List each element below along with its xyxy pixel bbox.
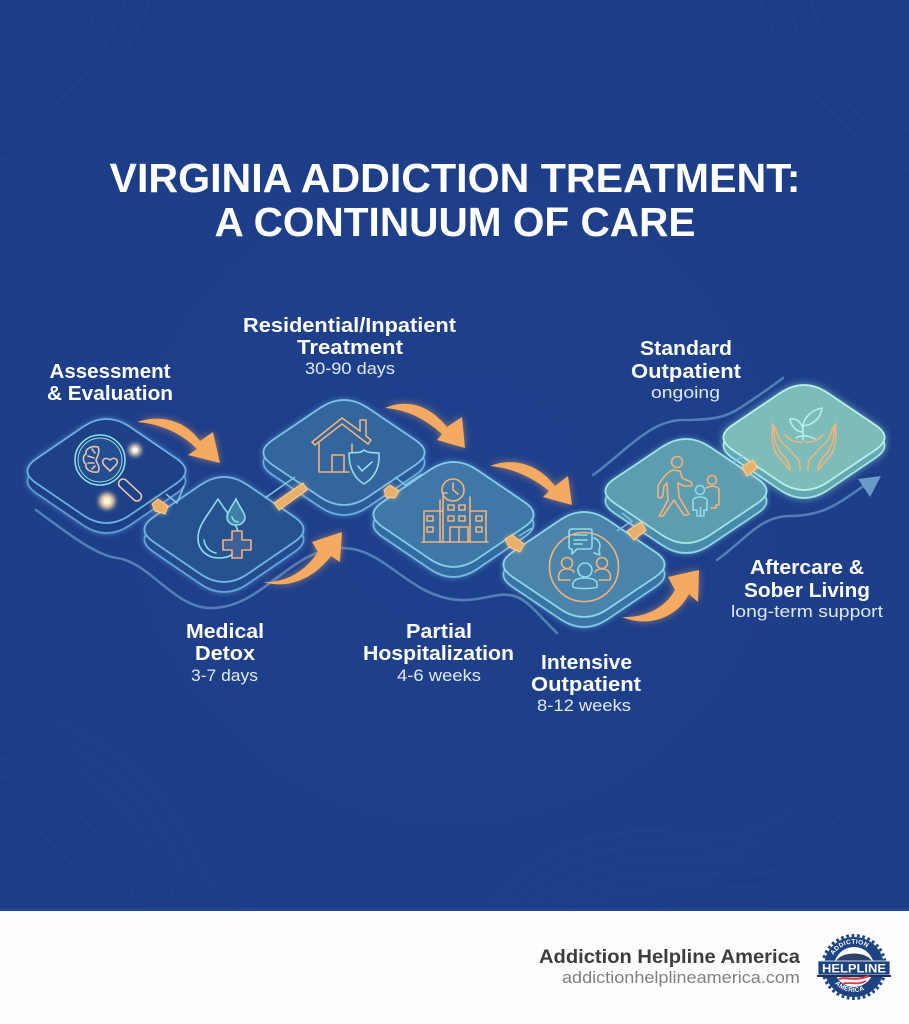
label: standard outpatient: ongoing — [651, 384, 720, 402]
label: medical detox: 3-7 days — [191, 667, 258, 685]
icon: water drops and medical cross — [198, 499, 251, 558]
tile 5: intensive outpatient — [503, 512, 665, 627]
arrow: intensive to standard — [622, 570, 699, 621]
label: medical detox: Medical — [186, 621, 264, 643]
label: partial hospitalization: Hospitalization — [363, 643, 514, 665]
label: medical detox — [186, 621, 264, 685]
logo badge: ADDICTION — [830, 939, 869, 956]
label: assessment — [47, 361, 173, 405]
label: residential: Treatment — [297, 337, 403, 359]
connector: 6 to 7 — [742, 460, 757, 476]
label: standard outpatient: Outpatient — [631, 361, 741, 383]
label: standard outpatient: Standard — [640, 338, 732, 360]
arrow: partial to intensive — [490, 462, 572, 505]
label: intensive outpatient — [531, 652, 641, 715]
connector: 2 to 3 — [274, 483, 307, 510]
label: standard outpatient — [631, 338, 741, 402]
tile link bands — [166, 455, 745, 536]
icon: house with shield — [312, 418, 379, 484]
footer panel — [0, 910, 909, 1024]
tile 4: partial hospitalization — [373, 462, 534, 577]
label: assessment: Assessment — [50, 361, 171, 383]
connector: 3 to 4 — [384, 485, 399, 498]
label: intensive outpatient: Outpatient — [531, 674, 641, 696]
label: medical detox: Detox — [195, 643, 255, 665]
connector: 4 to 5 — [505, 535, 524, 552]
tile 1: assessment — [27, 419, 186, 533]
connector: 5 to 6 — [627, 522, 646, 540]
tile 3: residential — [263, 400, 425, 515]
logo badge: AMERICA — [834, 982, 864, 992]
icon: magnifier with brain and heart — [75, 435, 143, 509]
icon: walking adult and children — [658, 456, 719, 516]
label: aftercare: Aftercare & — [750, 557, 864, 579]
label: aftercare: long-term support — [731, 603, 883, 621]
icon: group counselling circle — [550, 529, 618, 602]
flow line: upper right — [593, 378, 783, 475]
connector: 1 to 2 — [152, 499, 168, 514]
title — [110, 155, 800, 245]
label: intensive outpatient: Intensive — [541, 652, 632, 674]
label: residential — [243, 315, 456, 378]
tile 2: medical detox — [144, 477, 304, 592]
title: VIRGINIA ADDICTION TREATMENT: — [110, 155, 800, 201]
footer brand name: Addiction Helpline America — [539, 946, 800, 968]
label: residential: 30-90 days — [305, 360, 395, 378]
tile 6: standard outpatient — [605, 439, 767, 553]
footer edge — [0, 908, 909, 911]
logo badge — [817, 934, 891, 1000]
label: aftercare: Sober Living — [744, 580, 870, 602]
footer url: addictionhelplineamerica.com — [562, 968, 800, 987]
label: assessment: & Evaluation — [47, 383, 173, 405]
arrow: detox to residential — [263, 532, 342, 584]
label: intensive outpatient: 8-12 weeks — [537, 697, 631, 715]
arrow: residential to partial — [385, 404, 465, 448]
title: A CONTINUUM OF CARE — [214, 199, 696, 245]
flow line: lower left — [36, 510, 557, 633]
logo badge: HELPLINE — [822, 962, 886, 976]
label: residential: Residential/Inpatient — [243, 315, 456, 337]
tile 7: aftercare — [723, 385, 885, 498]
icon: hands holding sprout — [772, 408, 836, 470]
label: partial hospitalization — [363, 621, 514, 685]
label: aftercare — [731, 557, 883, 621]
icon: hospital building with clock — [422, 479, 488, 542]
label: partial hospitalization: 4-6 weeks — [397, 667, 481, 685]
arrow: assessment to detox — [137, 419, 220, 463]
label: partial hospitalization: Partial — [406, 621, 472, 643]
flow arrow: lower right — [717, 476, 881, 560]
